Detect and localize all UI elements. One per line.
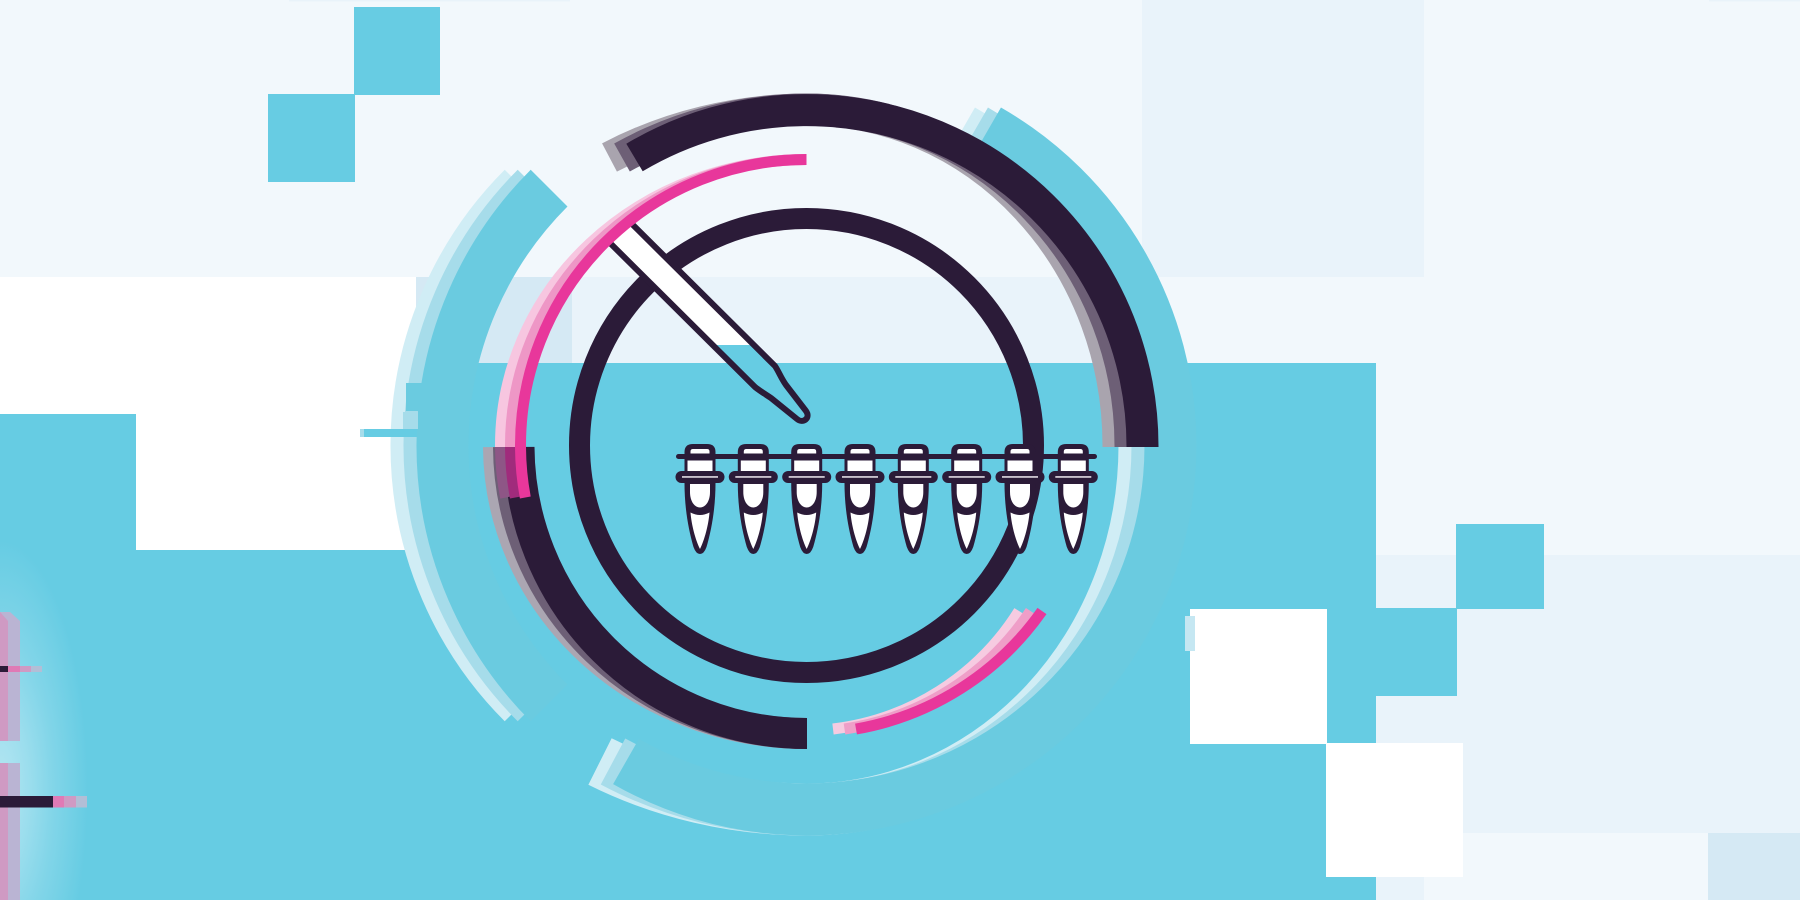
tube 2: [729, 444, 778, 554]
dark arc echo mid: [622, 110, 1130, 447]
background: right pale panel: [1376, 555, 1800, 833]
background: central pale band: [572, 277, 1142, 363]
blue outer ring: [416, 130, 1170, 810]
pink echo mid: [844, 611, 1030, 729]
blurred tube at left edge: [0, 540, 88, 900]
background: lower right strip: [1376, 877, 1424, 900]
bottom arc main: [519, 447, 807, 734]
background: lower right tinted square: [1708, 833, 1800, 900]
dark arc bottom left: [498, 447, 807, 734]
pink echo mid: [510, 160, 806, 498]
background: tinted band left: [416, 277, 572, 363]
dark inner ring: [580, 218, 1034, 672]
bottom arc echo mid: [508, 447, 807, 734]
pink echo light: [833, 611, 1019, 729]
ring main segments: [442, 130, 1170, 809]
background: top pale panel: [1142, 0, 1424, 277]
tube 4: [836, 444, 884, 554]
ring echo: mid: [429, 130, 1157, 810]
tube 5: [889, 444, 938, 554]
ring echo: lightest: [416, 130, 1145, 810]
background: white block left: [0, 277, 416, 550]
tube 3: [782, 444, 831, 554]
thin top edge lines: [289, 0, 1800, 2]
tube strip: [676, 444, 1098, 554]
blue and white squares right: [1185, 524, 1544, 877]
bottom arc echo light: [498, 447, 807, 734]
dark arc echo light: [610, 110, 1118, 447]
tube 6: [942, 444, 991, 554]
tube 7: [996, 444, 1044, 554]
tube 8: [1049, 444, 1098, 554]
ring side marks: [360, 383, 423, 437]
pink arc bottom right: [833, 611, 1042, 729]
dark arc main: [634, 110, 1143, 447]
pipette: [608, 221, 808, 421]
tube 1: [676, 444, 724, 554]
background: main blue field: [0, 363, 1376, 900]
pink echo light: [500, 160, 806, 498]
pink main: [520, 160, 806, 498]
pink main: [856, 611, 1042, 729]
dark arc top right: [610, 110, 1143, 447]
pink arc top left: [500, 160, 806, 498]
blue squares top left: [268, 7, 440, 182]
